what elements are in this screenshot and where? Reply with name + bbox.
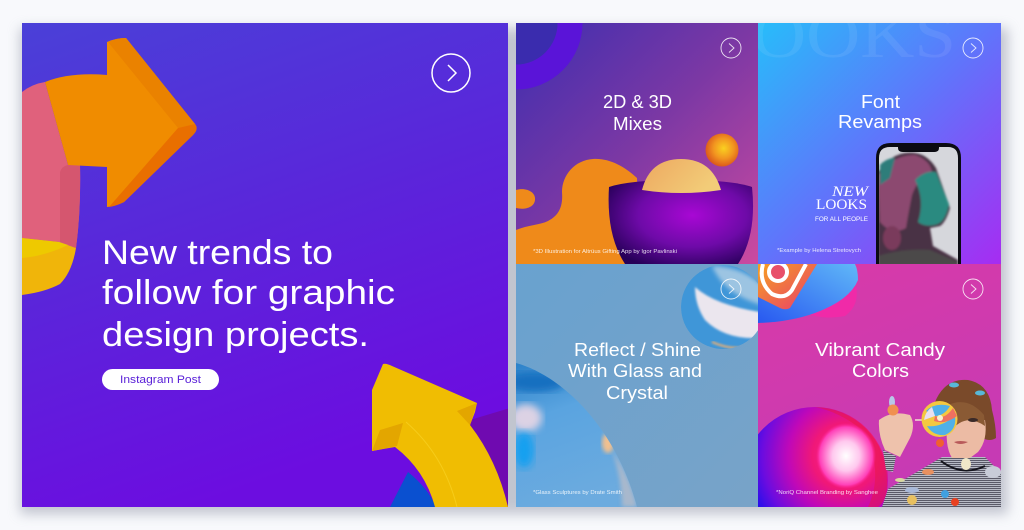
title: Revamps	[838, 112, 922, 132]
icon: next arrow circle	[721, 279, 741, 299]
glass sphere small	[681, 265, 765, 349]
decorative ring	[516, 23, 582, 90]
title	[838, 92, 922, 132]
heading	[102, 234, 395, 354]
title: 2D & 3D	[603, 92, 672, 112]
heading: design projects.	[102, 316, 369, 354]
caption: *3D Illustration for Altrüus Gifting App by Igor Pavlinski	[533, 249, 677, 255]
glass sphere large	[516, 363, 637, 507]
caption: *NoriQ Channel Branding by Sanghee	[776, 490, 878, 496]
heading: follow for graphic	[102, 274, 395, 312]
title: Mixes	[613, 114, 662, 134]
faint background lettering: OOKS	[752, 0, 956, 72]
icon: next arrow circle	[963, 279, 983, 299]
New Looks lettering: LOOKS	[816, 197, 867, 213]
New Looks lettering	[816, 186, 870, 221]
title: Reflect / Shine	[574, 340, 701, 360]
icon: next arrow circle	[963, 38, 983, 58]
button: Instagram Post: Instagram Post	[120, 374, 201, 386]
icon: next arrow circle	[721, 38, 741, 58]
orange blob	[516, 159, 640, 264]
title	[568, 340, 702, 403]
panel: font revamps	[758, 23, 1001, 264]
title: Font	[861, 92, 900, 112]
title: Crystal	[606, 383, 668, 403]
button: Instagram Post	[102, 369, 219, 390]
panel: 2D and 3D mixes	[516, 23, 758, 264]
icon: next arrow circle	[432, 54, 470, 92]
3D bowl and dome	[609, 159, 753, 264]
New Looks lettering: FOR ALL PEOPLE	[815, 216, 869, 223]
sphere	[706, 134, 738, 166]
panel: vibrant candy colors	[758, 264, 1001, 507]
panel: reflect and shine	[505, 264, 765, 510]
3D blob and Instagram icon	[758, 263, 858, 323]
caption: *Glass Sculptures by Drate Smith	[533, 490, 622, 496]
icon: orange and pink 3D arrow	[22, 38, 197, 295]
New Looks lettering: NEW	[831, 184, 870, 200]
girl with lollipop	[879, 380, 1001, 507]
3D mesh sphere	[758, 407, 888, 507]
title: With Glass and	[568, 361, 702, 381]
title: Colors	[852, 361, 909, 381]
heading: New trends to	[102, 234, 333, 272]
title	[604, 95, 672, 130]
icon: yellow 3D arrow and shapes	[372, 364, 510, 507]
caption: *Example by Helena Stretovych	[777, 248, 861, 254]
panel: main Instagram post	[22, 23, 510, 507]
title	[815, 342, 945, 377]
title: Vibrant Candy	[815, 340, 945, 360]
phone with portrait	[876, 143, 961, 266]
